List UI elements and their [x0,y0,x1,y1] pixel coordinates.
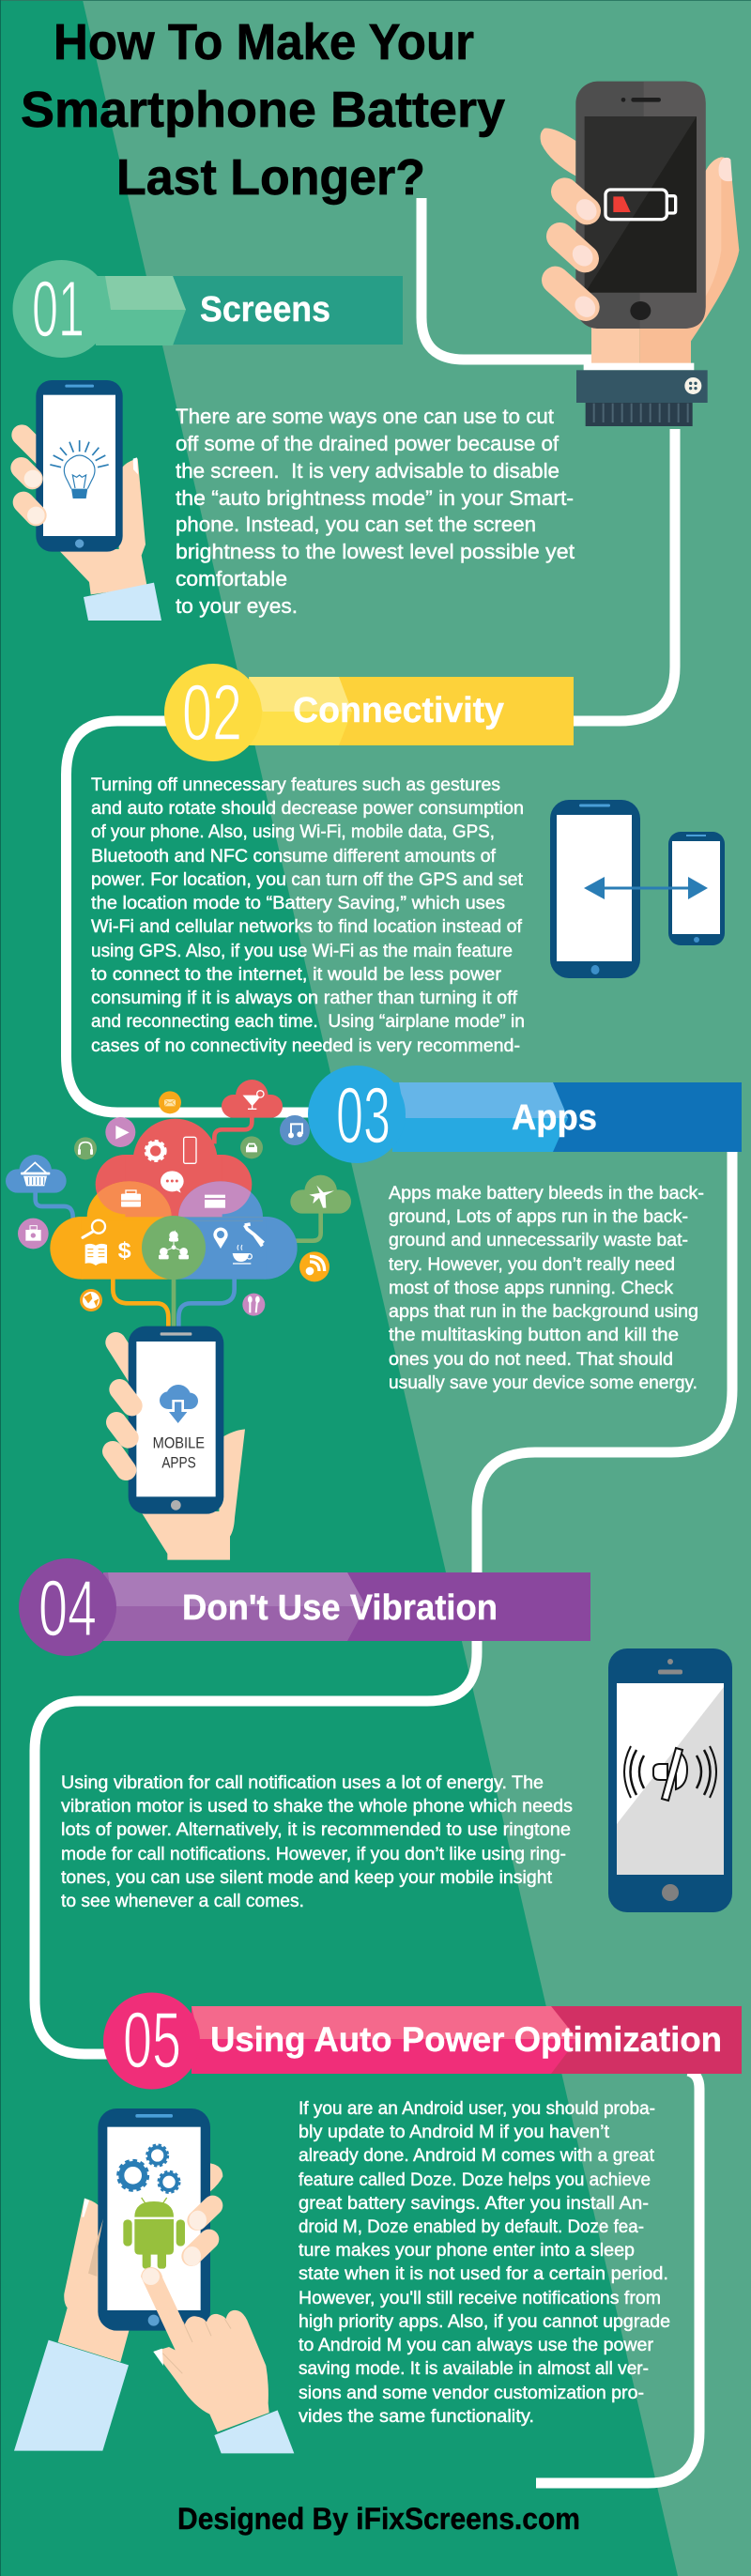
text block: screens: the “auto brightness mode” in your Smart- [176,486,574,510]
text block: apps: Apps make battery bleeds in the back- [389,1183,704,1204]
number 05: 05 [123,1996,181,2084]
heading: Connectivity: Connectivity [293,691,504,730]
text block: auto power optimization: However, you'll still receive notifications from [299,2288,661,2308]
text block: vibration: lots of power. Alternatively, it is recommended to use ringtone [61,1819,571,1840]
heading: Apps: Apps [512,1098,597,1138]
text block: screens [176,405,575,618]
phone [36,380,123,552]
text block: connectivity: Turning off unnecessary features such as gestures [91,774,500,795]
text block: vibration: Using vibration for call notification uses a lot of energy. The [61,1772,544,1793]
text block: connectivity: of your phone. Also, using Wi-Fi, mobile data, GPS, [91,821,495,842]
text block: apps: ground and unnecessarily waste bat- [389,1230,688,1250]
text block: screens: phone. Instead, you can set the screen [176,513,536,536]
text block: vibration: mode for call notifications. However, if you don’t like using ring- [61,1844,566,1864]
text block: connectivity: to connect to the internet, it would be less power [91,964,502,985]
section 1 banner [13,260,403,358]
text block: screens: off some of the drained power because of [176,432,559,455]
text block: apps: usually save your device some energy. [389,1372,697,1393]
text block: apps: apps that run in the background using [389,1301,698,1322]
text block: auto power optimization: feature called Doze. Doze helps you achieve [299,2170,651,2190]
text block: connectivity: Bluetooth and NFC consume different amounts of [91,846,497,866]
icon: download cloud [160,1385,198,1423]
text block: auto power optimization: saving mode. It is available in almost all ver- [299,2358,649,2379]
text block: auto power optimization: ture makes your phone enter into a sleep [299,2240,635,2261]
text block: connectivity: power. For location, you can turn off the GPS and set [91,869,524,890]
icon: hand holding mobile apps phone [113,1326,245,1560]
text block: apps: most of those apps running. Check [389,1278,673,1298]
text block: connectivity: the location mode to “Battery Saving,” which uses [91,893,505,913]
phone [129,1326,223,1514]
phone body [575,82,706,329]
text block: auto power optimization: great battery savings. After you install An- [299,2193,649,2214]
text block: connectivity: and auto rotate should decrease power consumption [91,798,524,819]
text block: auto power optimization: vides the same functionality. [299,2406,534,2427]
text block: apps: ones you do not need. That should [389,1349,673,1370]
icon: hands holding android phone [14,2108,294,2453]
text block: vibration: tones, you can use silent mode and keep your mobile insight [61,1867,553,1888]
text block: screens: to your eyes. [176,594,298,618]
icon: big and small phones with arrow [550,800,725,978]
section 3 banner [308,1066,742,1163]
icon: phone with muted speaker [608,1648,732,1912]
footer credit: Designed By iFixScreens.com [177,2502,580,2536]
gears [118,2145,179,2193]
heading: Using Auto Power Optimization: Using Auto Power Optimization [210,2020,722,2059]
text block: screens: brightness to the lowest level possible yet [176,540,575,563]
orange cloud [50,1181,176,1280]
text block: auto power optimization: state when it is not used for a certain period. [299,2263,668,2284]
number 01: 01 [32,265,84,353]
text block: connectivity: and reconnecting each time. Using “airplane mode” in [91,1011,525,1032]
number 02: 02 [182,668,242,757]
text block: connectivity: using GPS. Also, if you use Wi-Fi as the main feature [91,941,513,961]
icon: light bulb [50,440,109,498]
text block: screens: the screen. It is very advisable to disable [176,459,559,483]
text block: connectivity: consuming if it is always on rather than turning it off [91,988,518,1008]
section 2 banner [164,664,574,761]
small app icons [6,1080,351,1316]
text block: apps: the multitasking button and kill the [389,1325,679,1345]
number 04: 04 [38,1564,97,1652]
text block: screens: There are some ways one can use to cut [176,405,554,428]
icon: hand holding phone with low battery [541,82,739,426]
text block: vibration: to see whenever a call comes. [61,1891,304,1911]
connectors [36,1116,321,1330]
android robot [123,2198,185,2269]
right hand [141,2267,269,2432]
text block: connectivity: Wi-Fi and cellular networks to find location instead of [91,916,523,937]
red cloud [96,1119,252,1218]
text block: auto power optimization: bly update to Android M if you haven’t [299,2122,610,2142]
text block: auto power optimization: high priority apps. Also, if you cannot upgrade [299,2311,670,2332]
heading: Don't Use Vibration: Don't Use Vibration [182,1588,498,1628]
heading: Screens: Screens [200,290,330,330]
text block: auto power optimization [299,2098,670,2427]
phone [98,2108,210,2331]
cloud glyphs [83,1137,264,1265]
text block: vibration [61,1772,573,1911]
section 5 banner [103,1992,742,2090]
title: How To Make Your [54,14,474,70]
icon: hand holding phone with light bulb [22,380,161,621]
title: Last Longer? [116,149,425,206]
label: mobile apps: MOBILE [153,1434,205,1452]
label: mobile apps [153,1434,205,1471]
section 4 banner [19,1558,590,1656]
icon: mobile apps cloud [6,1080,351,1330]
text block: auto power optimization: to Android M you can always use the power [299,2335,653,2355]
text block: connectivity [91,774,525,1056]
icon: low battery [605,190,676,220]
text block: connectivity: cases of no connectivity needed is very recommend- [91,1035,520,1056]
number 03: 03 [336,1071,391,1159]
cloud glyphs: $ [118,1238,131,1264]
text block: apps: ground, Lots of apps run in the back- [389,1206,688,1227]
text block: auto power optimization: If you are an Android user, you should proba- [299,2098,655,2119]
text block: apps [389,1183,704,1393]
muted speaker glyph [624,1746,716,1801]
blue cloud [172,1181,298,1280]
text block: vibration: vibration motor is used to shake the whole phone which needs [61,1796,573,1817]
text block: auto power optimization: droid M, Doze enabled by default. Doze fea- [299,2216,644,2237]
label: mobile apps: APPS [161,1453,196,1471]
text block: screens: comfortable [176,567,287,590]
text block: auto power optimization: sions and some vendor customization pro- [299,2383,644,2403]
title: Smartphone Battery [21,82,505,138]
title [21,14,505,206]
text block: apps: tery. However, you don’t really need [389,1254,675,1275]
text block: auto power optimization: already done. Android M comes with a great [299,2145,655,2166]
